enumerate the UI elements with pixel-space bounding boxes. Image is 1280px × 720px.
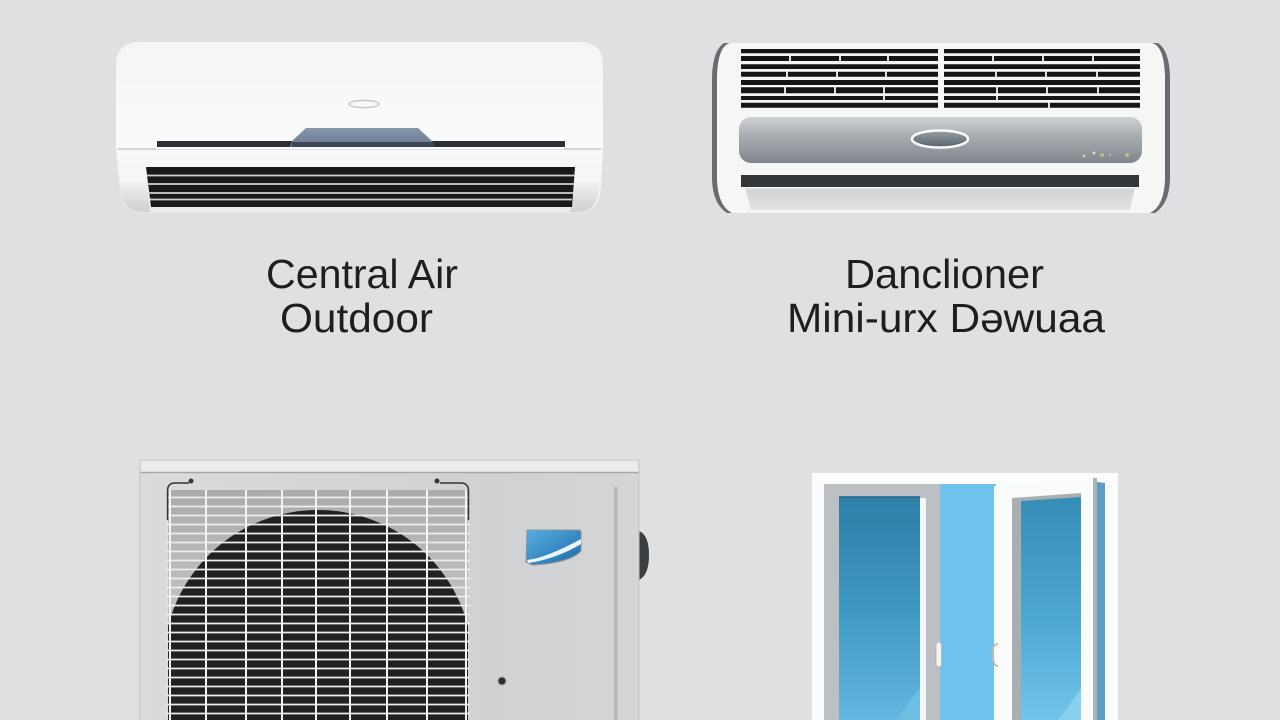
right handle (992, 644, 998, 666)
icon: central air wall unit (116, 42, 603, 213)
dark side edges (712, 43, 1170, 213)
icon: double window (812, 473, 1118, 720)
upper vent grille (741, 49, 1140, 108)
outer white frame (812, 473, 1118, 720)
label: central air outdoor: Outdoor (280, 295, 433, 341)
lower louvre (741, 175, 1139, 210)
label: central air outdoor (266, 251, 458, 341)
dark slot with blue display (157, 128, 565, 147)
label: danclioner mini-unit (787, 251, 1105, 341)
label: central air outdoor: Central Air (266, 251, 458, 297)
oval badge (912, 130, 968, 148)
air vent grille (146, 167, 575, 207)
side knob (639, 531, 649, 580)
unit body top cover (116, 42, 603, 149)
unit body lower section (116, 150, 603, 213)
icon: mini-split wall unit (712, 43, 1170, 213)
logo (349, 100, 379, 108)
icon: outdoor condenser unit (140, 460, 649, 720)
fan grille (166, 478, 470, 720)
status lights (1082, 152, 1129, 158)
cabinet top band (140, 460, 639, 472)
side seam (614, 487, 618, 720)
fan disc (168, 510, 468, 720)
brand badge (526, 530, 581, 565)
left window sash (824, 484, 940, 720)
cabinet body (140, 472, 639, 720)
unit body (717, 43, 1165, 213)
grey control panel (739, 117, 1142, 163)
blue outer edge (1097, 482, 1105, 720)
screw (498, 677, 506, 685)
label: danclioner mini-unit: Mini-urx Dəwuaa (787, 295, 1105, 341)
central opening (936, 484, 996, 720)
right window sash (994, 478, 1097, 720)
left handle (936, 642, 942, 667)
label: danclioner mini-unit: Danclioner (845, 251, 1044, 297)
